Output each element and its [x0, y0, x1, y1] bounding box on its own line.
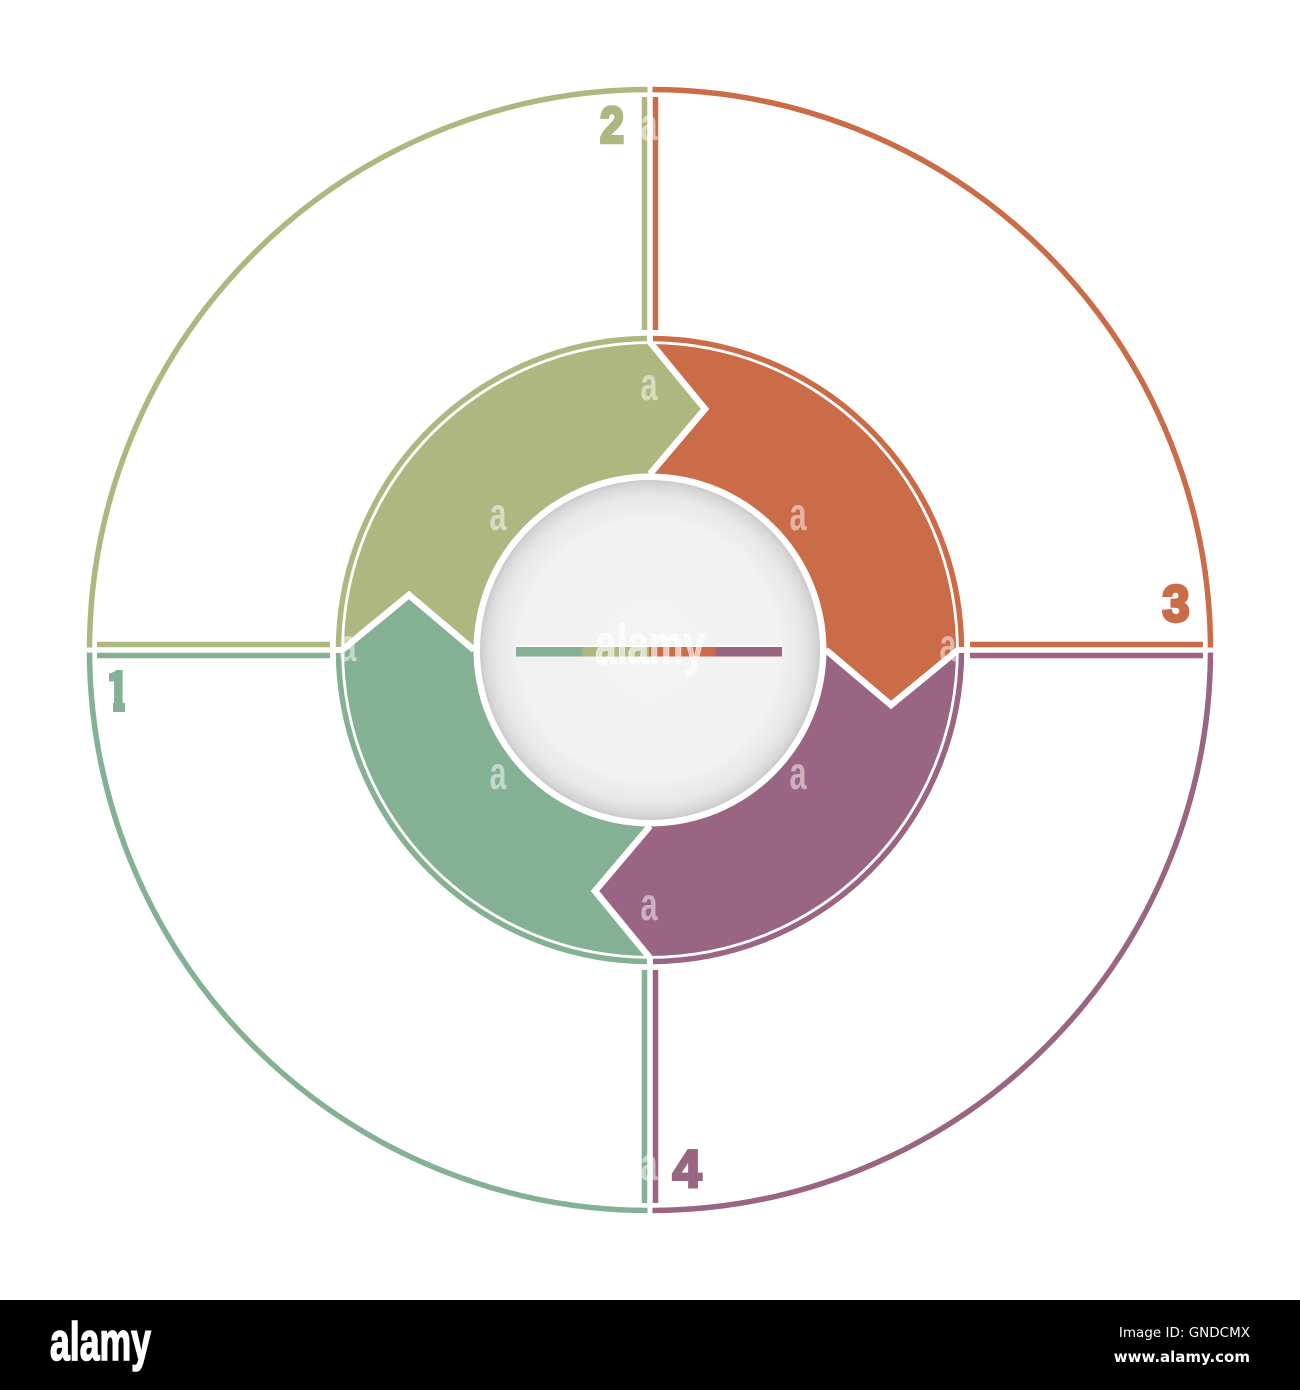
arrow 2: olive: [344, 344, 705, 650]
watermark: small marks: a: [490, 488, 507, 540]
watermark: centre: alamy: [595, 613, 705, 677]
watermark: small marks: a: [640, 878, 658, 930]
watermark: small marks: a: [340, 619, 357, 671]
footer image id: Image ID: GNDCMX: [1119, 1325, 1250, 1341]
panel 3: orange outer quadrant: [652, 90, 1210, 648]
watermark: small marks: a: [640, 358, 658, 410]
inner ring: four coloured arcs: [338, 338, 962, 962]
panel 4: purple outer quadrant: [652, 652, 1210, 1210]
centre colour bar: [516, 645, 782, 656]
centre circle: [474, 474, 826, 826]
panel 1: green outer quadrant: [90, 652, 648, 1210]
watermark: small marks: a: [640, 1138, 658, 1190]
number 1: 1: [105, 647, 130, 727]
watermark: small marks: a: [790, 747, 807, 799]
footer logo: alamy: [50, 1312, 151, 1372]
number 3: 3: [1162, 575, 1190, 632]
number 4: 4: [672, 1140, 702, 1199]
watermark: small marks: a: [790, 488, 807, 540]
watermark: small marks: a: [940, 619, 957, 671]
watermark: small marks: [340, 98, 957, 1190]
arrow 1: green: [344, 595, 650, 956]
footer url: www.alamy.com: [1114, 1348, 1250, 1366]
arrow 3: orange: [650, 344, 956, 705]
footer bar: [0, 1300, 1300, 1390]
number 2: 2: [600, 96, 624, 154]
panel 2: olive outer quadrant: [90, 90, 648, 648]
watermark: small marks: a: [490, 747, 507, 799]
watermark: small marks: a: [640, 98, 658, 150]
arrow 4: purple: [595, 650, 956, 956]
